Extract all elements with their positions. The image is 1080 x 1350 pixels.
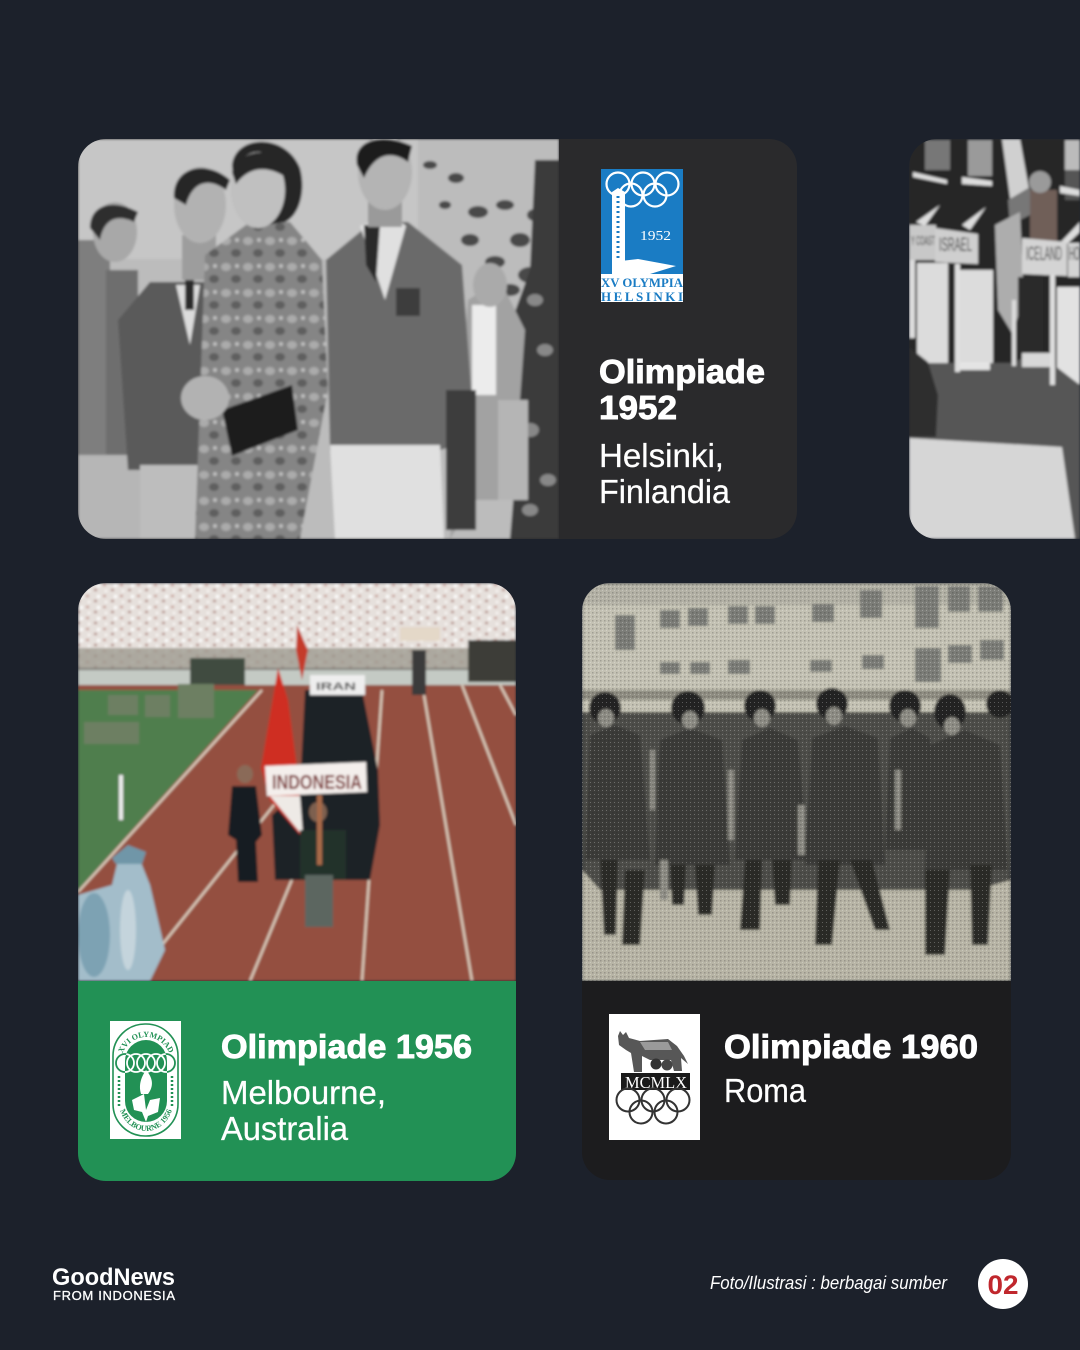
page number badge: 02 bbox=[988, 1270, 1018, 1300]
man 3 bbox=[326, 222, 475, 450]
logo: Melbourne 1956 bbox=[110, 1021, 181, 1139]
photo: Melbourne 1956 parade: INDONESIA bbox=[272, 772, 362, 794]
text: Roma: Roma bbox=[724, 1072, 807, 1109]
man 2 bbox=[118, 280, 206, 472]
logo: Helsinki 1952 bbox=[601, 169, 684, 304]
heading: Olimpiade 1956: Olimpiade 1956 bbox=[221, 1028, 472, 1065]
logo: GoodNews from Indonesia: GoodNews bbox=[52, 1264, 175, 1291]
text: Helsinki, Finlandia bbox=[599, 437, 731, 510]
text: Melbourne, Australia bbox=[221, 1074, 386, 1147]
photo: Melbourne 1956 parade bbox=[78, 583, 516, 981]
photo: Indonesian delegation 1952 bbox=[78, 134, 559, 539]
card background 1960 bbox=[582, 981, 1011, 1180]
woman bbox=[195, 222, 328, 539]
logo: Melbourne 1956: XVI OLYMPIAD bbox=[118, 1032, 174, 1054]
photo: Melbourne 1956 parade: IRAN bbox=[316, 681, 356, 693]
panel: Olimpiade 1960 card bbox=[582, 583, 1014, 1180]
marching column bbox=[272, 690, 380, 880]
logo: Rome 1960 bbox=[609, 1014, 700, 1140]
logo: GoodNews from Indonesia bbox=[52, 1264, 175, 1303]
logo: Melbourne 1956: MELBOURNE 1956 bbox=[120, 1108, 172, 1132]
logo: Helsinki 1952: 1952 bbox=[640, 229, 671, 244]
panel: partial photo card, Tokyo opening ceremony bbox=[909, 139, 1080, 539]
text: Melbourne, Australia: Australia bbox=[221, 1110, 349, 1147]
panel: Olimpiade 1952 card bbox=[78, 134, 797, 539]
photo: Rome 1960 parade bbox=[582, 583, 1014, 981]
panel: partial photo card, Tokyo opening ceremony: Y COAST bbox=[911, 233, 935, 248]
heading: Olimpiade 1952: Olimpiade bbox=[599, 353, 765, 390]
heading: Olimpiade 1952 bbox=[599, 353, 765, 426]
logo: Rome 1960: MCMLX bbox=[625, 1073, 687, 1092]
text: Melbourne, Australia: Melbourne, bbox=[221, 1074, 386, 1111]
text: Helsinki, Finlandia: Helsinki, bbox=[599, 437, 724, 474]
text: Helsinki, Finlandia: Finlandia bbox=[599, 473, 731, 510]
page number badge bbox=[978, 1259, 1028, 1309]
logo: Helsinki 1952: XV OLYMPIA bbox=[601, 275, 684, 290]
card background 1956 bbox=[78, 981, 516, 1181]
heading: Olimpiade 1960: Olimpiade 1960 bbox=[724, 1028, 978, 1065]
marching men bbox=[585, 725, 1008, 870]
card background 1952 bbox=[78, 139, 797, 539]
foliage bbox=[423, 161, 543, 296]
panel: partial photo card, Tokyo opening ceremony: ISRAEL bbox=[939, 235, 972, 256]
logo: Helsinki 1952: HELSINKI bbox=[601, 289, 683, 304]
far-left figures bbox=[78, 238, 111, 456]
rear rank bbox=[582, 712, 1011, 890]
panel: Olimpiade 1956 card bbox=[78, 583, 516, 1181]
heading: Olimpiade 1952: 1952 bbox=[599, 389, 677, 426]
source credit: Foto/Ilustrasi : berbagai sumber bbox=[710, 1273, 948, 1293]
logo: GoodNews from Indonesia: FROM INDONESIA bbox=[53, 1288, 175, 1303]
